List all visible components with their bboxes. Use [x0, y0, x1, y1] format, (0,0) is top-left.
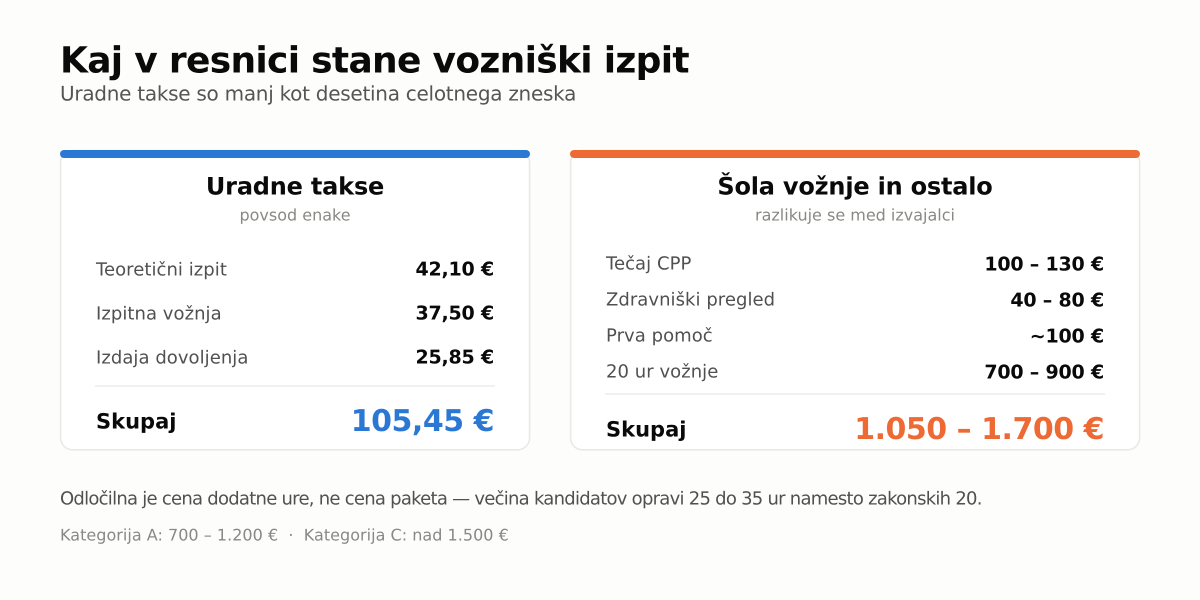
footnote: Odločilna je cena dodatne ure, ne cena paketa — večina kandidatov opravi 25 do 35 ur namesto zakonskih 20.	[60, 488, 982, 510]
total: driving school	[606, 412, 1104, 447]
row: licence issue	[96, 346, 494, 368]
title: Kaj v resnici stane vozniški izpit	[60, 40, 689, 81]
row: course	[605, 253, 1104, 275]
row: driving exam: Izpitna vožnja	[96, 304, 222, 324]
row: licence issue: Izdaja dovoljenja	[96, 348, 248, 368]
panel heading: driving school: Šola vožnje in ostalo	[717, 172, 993, 200]
row: licence issue: 25,85 €	[415, 346, 494, 368]
row: driving hours	[606, 361, 1104, 383]
total: driving school: Skupaj	[606, 418, 686, 442]
row: medical check: Zdravniški pregled	[606, 290, 775, 310]
total: official fees: 105,45 €	[351, 404, 494, 439]
panel: official fees	[60, 150, 530, 450]
row: medical check	[606, 289, 1104, 311]
total: driving school: 1.050 – 1.700 €	[854, 412, 1104, 447]
panel subheading: driving school: razlikuje se med izvajalci	[755, 206, 955, 224]
row: driving exam	[96, 302, 494, 324]
row: first aid: Prva pomoč	[606, 326, 713, 346]
total: official fees: Skupaj	[96, 410, 176, 434]
row: course: Tečaj CPP	[605, 254, 691, 274]
row: theory exam: 42,10 €	[415, 258, 494, 280]
panel: driving school and other	[570, 150, 1140, 450]
row: course: 100 – 130 €	[984, 253, 1104, 275]
row: driving hours: 700 – 900 €	[984, 361, 1104, 383]
row: driving exam: 37,50 €	[415, 302, 494, 324]
row: medical check: 40 – 80 €	[1010, 289, 1104, 311]
panel subheading: official fees: povsod enake	[239, 206, 351, 224]
row: driving hours: 20 ur vožnje	[606, 362, 718, 382]
row: theory exam: Teoretični izpit	[95, 260, 227, 280]
panel heading: official fees: Uradne takse	[206, 172, 384, 200]
subtitle: Uradne takse so manj kot desetina celotnega zneska	[60, 82, 576, 106]
row: theory exam	[95, 258, 494, 280]
row: first aid	[606, 325, 1104, 347]
categories note: Kategorija A: 700 – 1.200 € · Kategorija C: nad 1.500 €	[60, 526, 509, 544]
row: first aid: ~100 €	[1030, 325, 1104, 347]
total: official fees	[96, 404, 494, 439]
